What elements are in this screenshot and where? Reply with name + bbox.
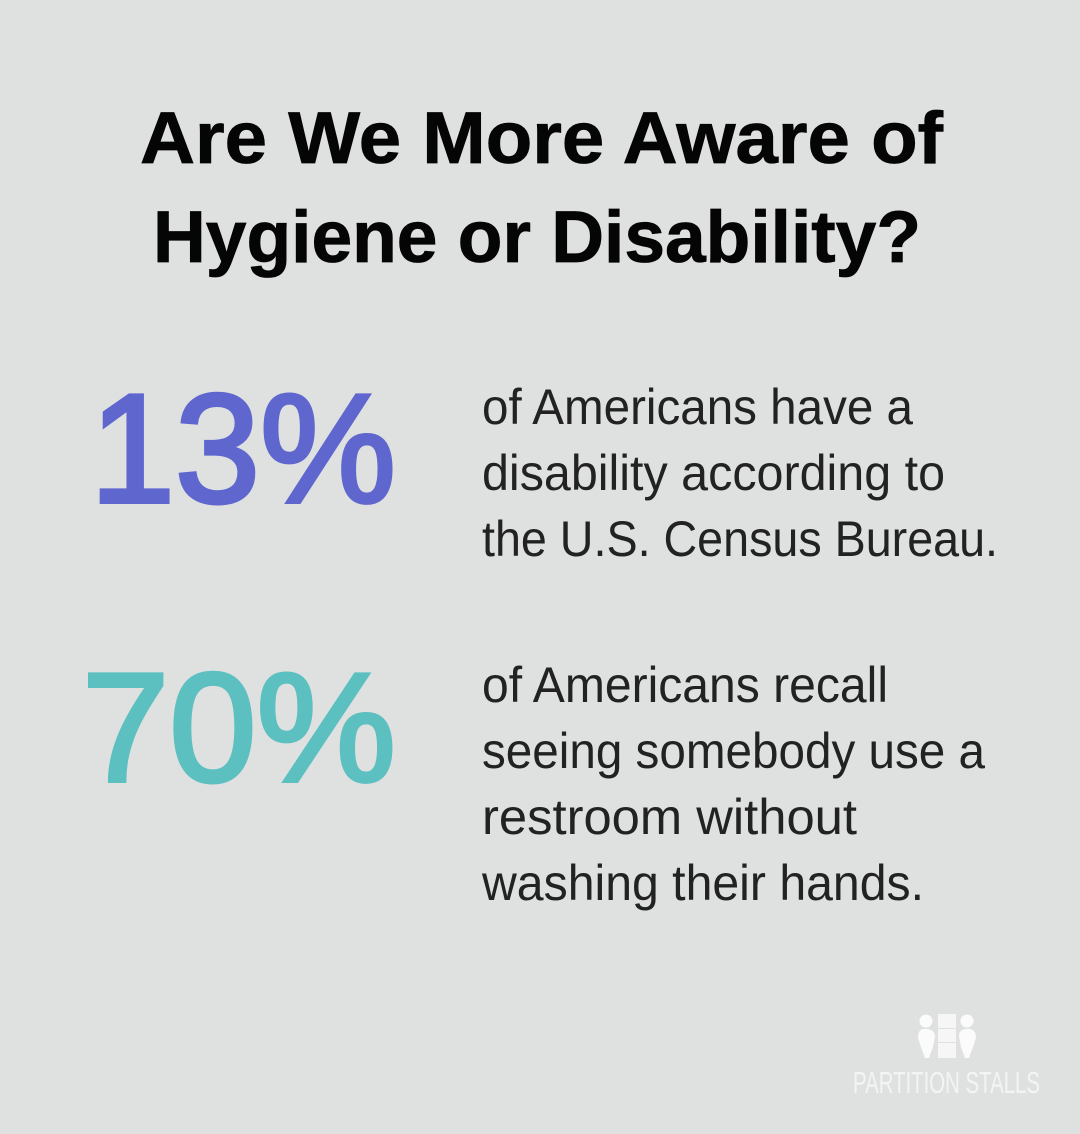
- text block: disability description: [482, 379, 998, 567]
- logo: Partition Stalls: [853, 1014, 1040, 1100]
- icon: right person: [959, 1014, 976, 1058]
- text block: handwashing description: seeing somebody use a: [482, 723, 985, 779]
- text block: handwashing description: restroom without: [482, 789, 857, 845]
- text block: handwashing description: of Americans recall: [482, 657, 888, 713]
- text block: disability description: of Americans have a: [482, 379, 913, 435]
- stat: 13%: 13%: [90, 362, 396, 535]
- text block: handwashing description: washing their hands.: [481, 855, 924, 911]
- text block: handwashing description: [481, 657, 985, 911]
- text block: disability description: the U.S. Census Bureau.: [482, 511, 998, 567]
- stat: 70%: 70%: [82, 641, 396, 814]
- title: Hygiene or Disability?: [153, 197, 921, 278]
- title: Are We More Aware of: [140, 98, 944, 179]
- icon: stall partition: [938, 1014, 956, 1058]
- title: [140, 98, 944, 278]
- icon: left person: [918, 1014, 935, 1058]
- text block: disability description: disability according to: [482, 445, 945, 501]
